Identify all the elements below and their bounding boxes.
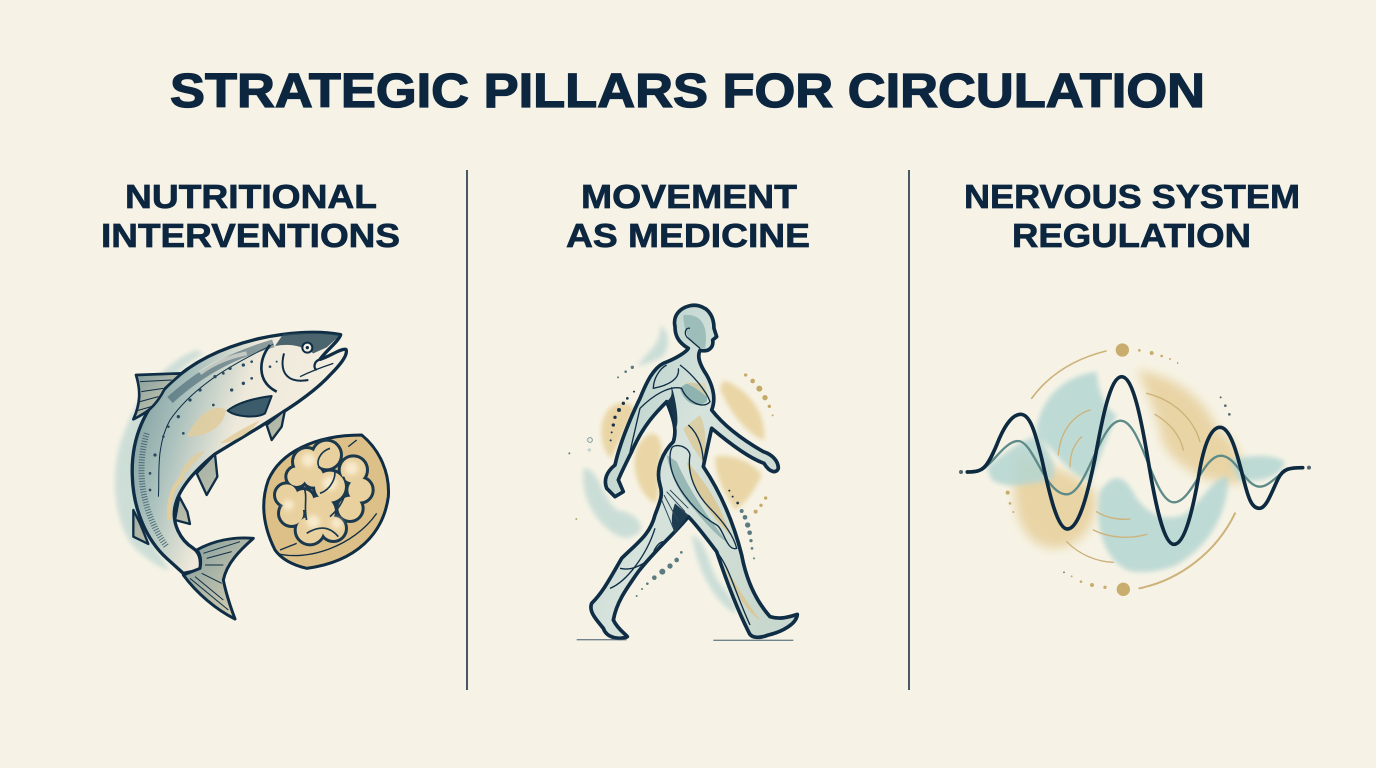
heading: nervous system regulation: REGULATION	[1012, 217, 1251, 254]
icon: walnut	[264, 435, 389, 568]
heading: movement as medicine: AS MEDICINE	[566, 217, 810, 254]
icon: nervous system wave	[959, 343, 1311, 596]
heading: movement as medicine: MOVEMENT	[581, 178, 797, 215]
heading: nervous system regulation	[964, 178, 1300, 254]
heading: nutritional interventions	[101, 178, 400, 254]
icon: walking figure	[568, 305, 797, 640]
heading: nutritional interventions: NUTRITIONAL	[125, 178, 377, 215]
title: STRATEGIC PILLARS FOR CIRCULATION	[170, 65, 1205, 118]
panel: nervous system regulation	[959, 178, 1311, 596]
divider	[467, 170, 909, 690]
panel: movement as medicine	[566, 178, 810, 640]
panel: nutritional interventions	[101, 178, 400, 619]
heading: nutritional interventions: INTERVENTIONS	[101, 217, 400, 254]
heading: movement as medicine	[566, 178, 810, 254]
icon: salmon	[115, 332, 346, 619]
ground shadows	[577, 638, 793, 642]
heading: nervous system regulation: NERVOUS SYSTEM	[964, 178, 1300, 215]
